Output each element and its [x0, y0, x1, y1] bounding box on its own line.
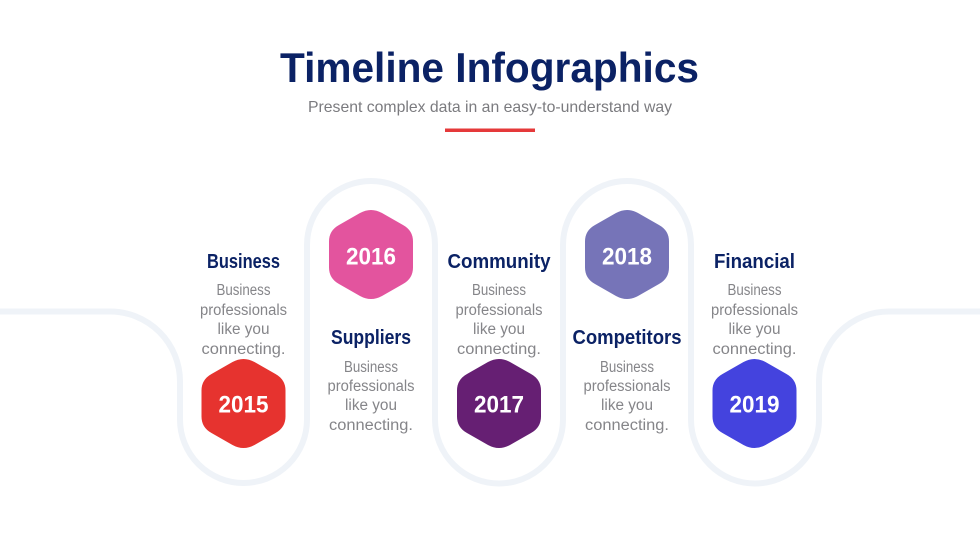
heading: Business: [207, 251, 280, 273]
hexagon 2018: [585, 210, 669, 299]
hexagon 2016: [329, 210, 413, 299]
description: like you: [728, 321, 780, 338]
description: Business: [344, 359, 398, 376]
heading: Suppliers: [331, 327, 411, 349]
hexagon 2018: 2018: [602, 244, 652, 270]
description: [456, 282, 543, 358]
title: Timeline Infographics: [280, 44, 699, 91]
description: [711, 282, 798, 358]
description: [200, 282, 287, 358]
step 2019: Financial: [711, 251, 798, 448]
step 2017: Community: [448, 251, 551, 448]
description: professionals: [200, 302, 287, 319]
description: like you: [601, 397, 653, 414]
description: professionals: [584, 378, 671, 395]
hexagon 2019: [712, 359, 796, 448]
hexagon 2015: [202, 359, 286, 448]
heading: Competitors: [572, 327, 682, 349]
description: connecting.: [457, 341, 541, 358]
heading: Community: [448, 251, 551, 273]
hexagon 2016: 2016: [346, 244, 396, 270]
hexagon 2017: [457, 359, 541, 448]
description: Business: [216, 282, 271, 299]
description: connecting.: [712, 341, 796, 358]
description: [584, 359, 671, 434]
hexagon 2015: 2015: [218, 392, 268, 418]
description: [328, 359, 415, 434]
red accent underline: [445, 128, 535, 132]
description: professionals: [328, 378, 415, 395]
hexagon 2019: 2019: [730, 392, 780, 418]
description: like you: [473, 321, 525, 338]
subtitle: Present complex data in an easy-to-understand way: [308, 99, 672, 116]
heading: Financial: [714, 251, 795, 273]
description: connecting.: [202, 341, 286, 358]
description: connecting.: [329, 417, 413, 434]
description: Business: [728, 282, 782, 299]
step 2015: Business: [200, 251, 287, 448]
hexagon 2017: 2017: [474, 392, 524, 418]
description: like you: [218, 321, 270, 338]
description: like you: [345, 397, 397, 414]
description: professionals: [456, 302, 543, 319]
timeline wave path: [0, 181, 980, 484]
description: connecting.: [585, 417, 669, 434]
step 2016: Suppliers: [328, 210, 415, 434]
description: Business: [600, 359, 654, 376]
description: Business: [472, 282, 526, 299]
description: professionals: [711, 302, 798, 319]
step 2018: Competitors: [572, 210, 682, 434]
